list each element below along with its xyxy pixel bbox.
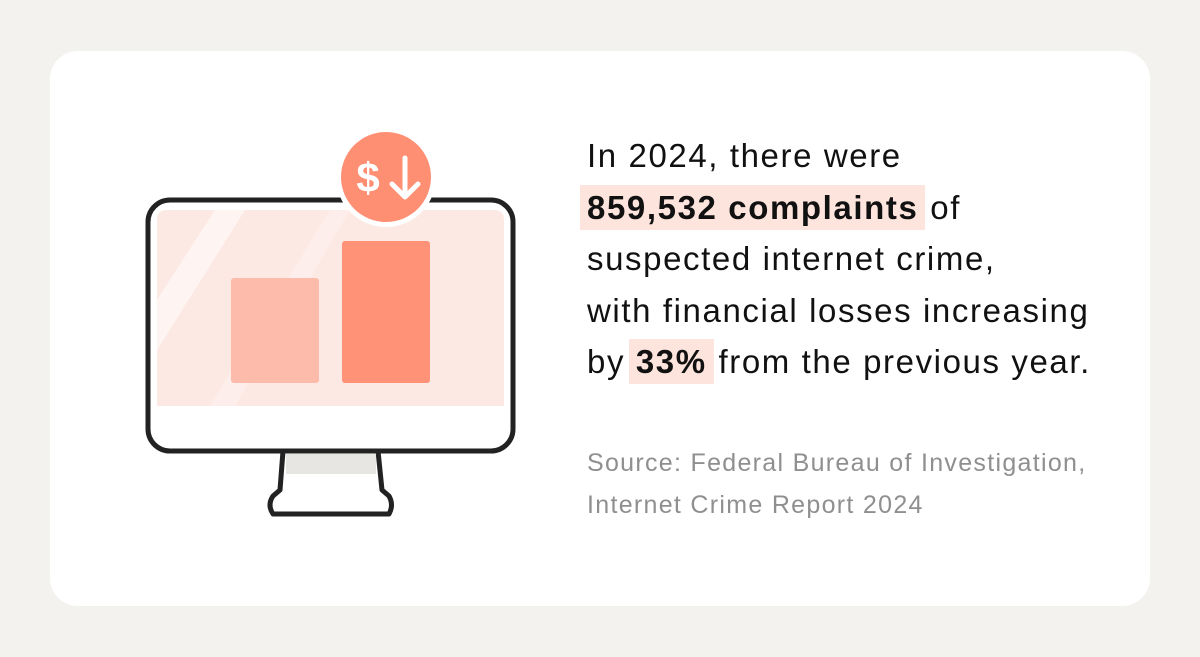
main statistic text: with financial losses increasing (587, 292, 1089, 328)
main statistic text: 859,532 complaints of (587, 188, 961, 226)
icon: dollar down badge (336, 127, 436, 227)
source text: Source: Federal Bureau of Investigation, (587, 449, 1086, 477)
monitor screen (148, 200, 513, 451)
main statistic text: suspected internet crime, (587, 240, 996, 277)
icon: dollar down badge: $ (356, 154, 380, 201)
monitor stand (270, 451, 392, 514)
source text: Internet Crime Report 2024 (587, 491, 924, 519)
source text (587, 449, 1086, 519)
bar chart (231, 241, 430, 383)
main statistic text: In 2024, there were (587, 137, 902, 174)
main statistic text: by 33% from the previous year. (587, 343, 1091, 380)
card (50, 51, 1150, 606)
main statistic text (580, 137, 1091, 384)
